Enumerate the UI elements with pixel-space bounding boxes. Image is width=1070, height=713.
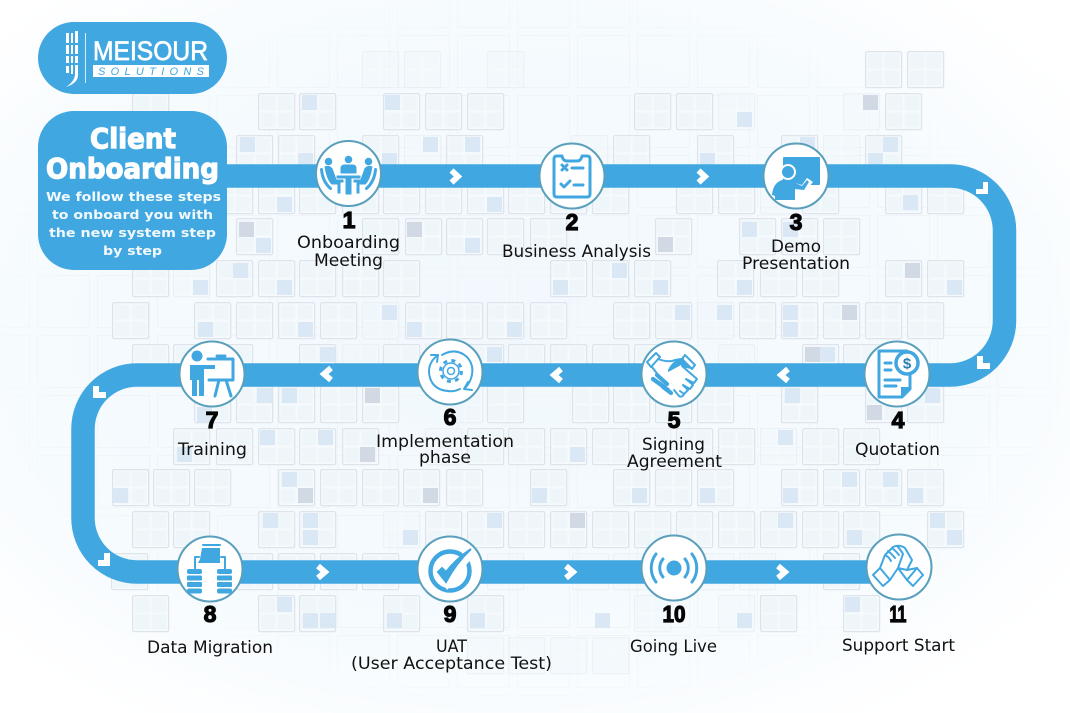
label: phase: [419, 448, 471, 467]
number: 3: [790, 209, 802, 235]
label: Data Migration: [147, 638, 273, 657]
label: [376, 432, 514, 467]
process track: [83, 176, 1004, 572]
description: to onboard you with: [52, 208, 213, 223]
number: 11: [890, 601, 907, 627]
step 9: user acceptance test: [351, 536, 552, 673]
label: Presentation: [742, 254, 850, 273]
number: 7: [206, 407, 218, 433]
logo tagline: SOLUTIONS: [98, 66, 205, 78]
label: [742, 237, 850, 273]
number: 9: [444, 601, 456, 627]
heading: Onboarding: [46, 152, 219, 185]
number: 1: [343, 207, 356, 233]
step 7: training: [177, 342, 247, 459]
logo wordmark: MEISOUR: [93, 36, 208, 66]
heading: Client: [90, 122, 176, 155]
label: [627, 435, 723, 471]
icon: folder between databases: [178, 536, 242, 602]
description: by step: [103, 244, 162, 259]
icon: gear with cycle arrows: [418, 340, 482, 404]
logo badge: [38, 22, 227, 94]
icon: quote document with coin: $: [903, 356, 912, 372]
label: Meeting: [314, 251, 383, 270]
background tile pattern: [111, 51, 964, 674]
icon: clasped arms: [866, 534, 932, 600]
title panel: [38, 111, 227, 270]
label: Agreement: [627, 452, 723, 471]
direction chevrons: [318, 170, 788, 578]
step 11: support start: [842, 534, 956, 655]
label: Signing: [642, 435, 705, 454]
label: Quotation: [855, 440, 940, 459]
icon: checklist clipboard: [540, 144, 604, 208]
icon: handshake: [642, 342, 706, 406]
label: [351, 637, 552, 673]
label: Implementation: [376, 432, 514, 451]
icon: trainer at easel: [180, 342, 244, 406]
label: UAT: [436, 637, 468, 656]
icon: broadcast signal: [642, 536, 706, 600]
description: We follow these steps: [46, 190, 221, 205]
number: 10: [662, 601, 686, 627]
label: Onboarding: [297, 233, 400, 252]
icon: presenter at board: [764, 144, 828, 208]
label: Training: [177, 440, 247, 459]
description: [46, 190, 221, 259]
icon: meeting table: [316, 141, 381, 206]
label: [297, 233, 400, 270]
label: (User Acceptance Test): [351, 654, 552, 673]
step 3: demo presentation: [742, 144, 850, 273]
label: Demo: [771, 237, 821, 256]
number: 8: [204, 601, 217, 627]
label: Going Live: [630, 637, 717, 656]
number: 4: [892, 407, 905, 433]
number: 2: [566, 209, 578, 235]
number: 5: [668, 407, 681, 433]
step 1: onboarding meeting: [297, 141, 400, 270]
logo emblem: [66, 31, 78, 87]
icon: check mark in circle: [418, 536, 482, 602]
label: Support Start: [842, 636, 956, 655]
step 4: quotation: [855, 342, 940, 459]
step 5: signing agreement: [627, 342, 723, 471]
step 10: going live: [630, 536, 717, 656]
step 2: business analysis: [502, 144, 651, 261]
corner direction arrows: [93, 182, 990, 566]
description: the new system step: [49, 226, 216, 241]
step 6: implementation phase: [376, 340, 514, 467]
label: Business Analysis: [502, 242, 651, 261]
step 8: data migration: [147, 536, 273, 657]
heading: [46, 122, 219, 185]
number: 6: [444, 404, 456, 430]
